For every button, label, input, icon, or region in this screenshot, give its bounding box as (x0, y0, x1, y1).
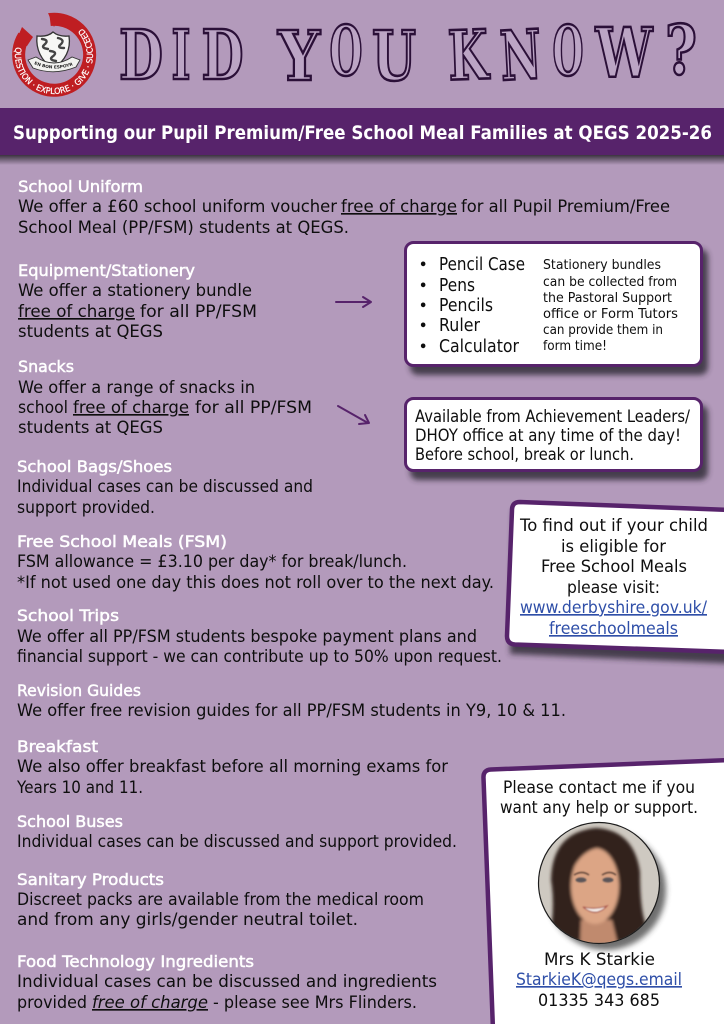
title: did you know: O (330, 12, 362, 92)
section: revision guides (17, 681, 566, 720)
title: did you know: Y (277, 17, 321, 97)
title: did you know: O (552, 12, 584, 92)
bundle item list: • (419, 340, 427, 355)
bundle item list: • (419, 279, 427, 294)
bundle collection note (543, 257, 678, 354)
bundle collection note: can be collected from (543, 274, 677, 290)
bundle item list: • (419, 319, 427, 334)
section: food technology ingredients: provided (17, 993, 87, 1012)
bundle item list: Pencils (439, 295, 493, 316)
section: equipment and stationery: students at QEGS (18, 322, 163, 341)
bundle collection note: the Pastoral Support (543, 290, 672, 306)
bundle collection note: office or Form Tutors (543, 306, 678, 322)
title: did you know: D (202, 16, 244, 96)
bundle item list: Pens (439, 275, 475, 296)
bundle collection note: can provide them in (543, 322, 663, 338)
panel: stationery bundle (406, 242, 708, 375)
title: did you know: N (498, 15, 543, 97)
panel: free school meals eligibility: is eligible for (561, 537, 666, 556)
section: food technology ingredients: free of charge (92, 993, 208, 1012)
bundle collection note: form time! (543, 338, 607, 354)
title: did you know: I (172, 16, 190, 96)
title: did you know (119, 11, 697, 97)
section: breakfast: We also offer breakfast before all morning exams for (17, 757, 448, 776)
logo crest marks (42, 38, 64, 61)
section: free school meals: *If not used one day this does not roll over to the next day. (17, 573, 494, 592)
section: breakfast: Breakfast (17, 737, 98, 756)
section: sanitary products: and from any girls/gender neutral toilet. (17, 910, 358, 929)
panel: snack availability: Before school, break or lunch. (415, 445, 634, 464)
banner (0, 108, 724, 165)
section: school trips: We offer all PP/FSM students bespoke payment plans and (17, 627, 477, 646)
section: sanitary products: Sanitary Products (17, 870, 164, 889)
section: equipment and stationery: Equipment/Stationery (18, 261, 195, 280)
section: snacks: free of charge (73, 398, 189, 417)
logo motto: QUESTION · EXPLORE · GIVE · SUCCEED (14, 29, 94, 94)
bundle item list (419, 254, 525, 357)
panel: free school meals eligibility: Free School Meals (541, 557, 687, 576)
panel: contact: Please contact me if you (503, 778, 695, 797)
section: school trips: School Trips (17, 606, 119, 625)
section: school buses: School Buses (17, 812, 123, 831)
website link: freeschoolmeals (549, 619, 678, 638)
bundle item list: Pencil Case (439, 254, 525, 275)
section: school bags and shoes: School Bags/Shoes (17, 457, 172, 476)
section: school uniform (18, 177, 670, 237)
panel: contact: want any help or support. (500, 798, 698, 817)
panel: free school meals eligibility: To find out if your child (519, 516, 708, 535)
panel: free school meals eligibility: please visit: (567, 578, 660, 597)
section: free school meals: FSM allowance = £3.10 per day* for break/lunch. (17, 552, 407, 571)
contact details: Mrs K Starkie (544, 950, 655, 969)
section: food technology ingredients: Food Technology Ingredients (17, 952, 254, 971)
section: revision guides: We offer free revision guides for all PP/FSM students in Y9, 10 & 11. (17, 701, 566, 720)
section: food technology ingredients (17, 952, 437, 1012)
section: sanitary products: Discreet packs are available from the medical room (17, 890, 424, 909)
bundle item list: • (419, 258, 427, 273)
section: equipment and stationery: for all PP/FSM (140, 302, 257, 321)
section: school buses (17, 812, 457, 851)
contact details: 01335 343 685 (538, 991, 660, 1010)
section: school uniform: for all Pupil Premium/Free (461, 197, 670, 216)
website link: www.derbyshire.gov.uk/ (520, 598, 707, 617)
bundle item list: Ruler (439, 315, 481, 336)
section: free school meals: Free School Meals (FSM) (17, 532, 227, 551)
panel: snack availability: Available from Achievement Leaders/ (415, 407, 690, 426)
section: free school meals (17, 532, 494, 592)
section: school trips (17, 606, 502, 666)
panel: snack availability: DHOY office at any time of the day! (415, 426, 681, 445)
portrait photo (538, 822, 666, 950)
section: food technology ingredients: Individual cases can be discussed and ingredients (17, 972, 437, 991)
section: equipment and stationery (18, 261, 257, 341)
section: revision guides: Revision Guides (17, 681, 141, 700)
arrow: snacks to availability box (338, 406, 369, 424)
contact details: StarkieK@qegs.email (516, 970, 682, 989)
contact details (516, 950, 682, 1010)
section: snacks: school (18, 398, 68, 417)
logo scroll text: EN BON ESPOYR (34, 61, 73, 68)
section: snacks: Snacks (18, 357, 74, 376)
section: school buses: Individual cases can be discussed and support provided. (17, 832, 457, 851)
bundle item list: • (419, 299, 427, 314)
section: school trips: financial support - we can contribute up to 50% upon request. (17, 647, 502, 666)
section: school bags and shoes: Individual cases can be discussed and (17, 477, 313, 496)
logo scroll (28, 57, 80, 72)
panel: free school meals eligibility (507, 502, 724, 664)
section: snacks (18, 357, 312, 437)
section: school uniform: School Meal (PP/FSM) students at QEGS. (18, 218, 349, 237)
section: school uniform: We offer a £60 school uniform voucher (18, 197, 337, 216)
website link (520, 598, 707, 638)
panel: contact (483, 760, 724, 1024)
section: school uniform: free of charge (341, 197, 457, 216)
section: food technology ingredients: - please see Mrs Flinders. (213, 993, 417, 1012)
section: snacks: We offer a range of snacks in (18, 378, 255, 397)
section: equipment and stationery: free of charge (18, 302, 135, 321)
bundle collection note: Stationery bundles (543, 257, 661, 273)
title: did you know: W (595, 14, 654, 94)
section: school uniform: School Uniform (18, 177, 143, 196)
section: breakfast: Years 10 and 11. (16, 778, 143, 797)
section: snacks: students at QEGS (18, 418, 163, 437)
panel: snack availability (406, 398, 708, 480)
title: did you know: U (372, 17, 416, 97)
bundle item list: Calculator (439, 336, 520, 357)
school logo (12, 12, 96, 97)
title: did you know: K (447, 15, 492, 97)
section: school bags and shoes (17, 457, 313, 517)
arrow: stationery to bundle box (336, 297, 371, 307)
title: did you know: D (119, 16, 163, 96)
section: sanitary products (17, 870, 424, 929)
section: school bags and shoes: support provided. (17, 498, 155, 517)
section: breakfast (16, 737, 448, 797)
section: snacks: for all PP/FSM (195, 398, 312, 417)
title: did you know: ? (665, 11, 697, 91)
logo shield (37, 32, 69, 69)
section: equipment and stationery: We offer a stationery bundle (18, 281, 252, 300)
